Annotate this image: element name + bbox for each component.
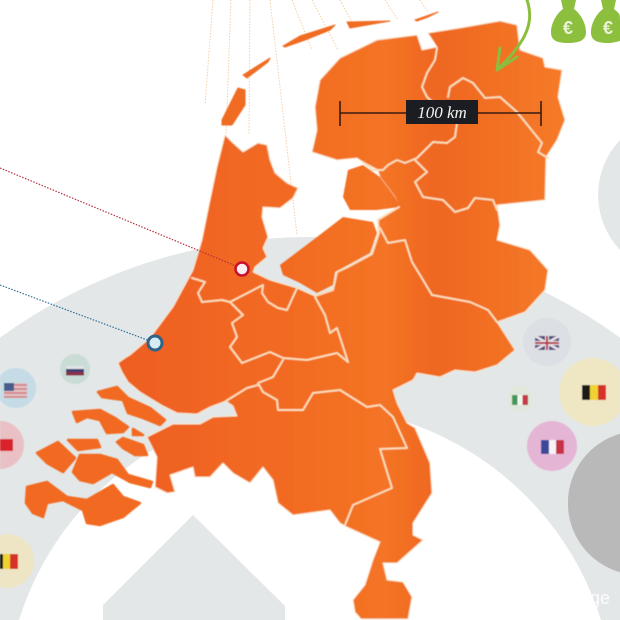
dotted connector: red to Amsterdam bbox=[0, 168, 236, 266]
province borders bbox=[192, 48, 548, 525]
bubbles and flags bbox=[0, 318, 620, 588]
Wadden islands bbox=[222, 12, 438, 125]
watermark text fragment: ge bbox=[590, 588, 610, 608]
background ring: grey band bbox=[0, 237, 620, 620]
mainland provinces bbox=[118, 21, 565, 619]
icon: money bag 2 bbox=[591, 0, 620, 43]
bubble: United States bbox=[0, 368, 36, 408]
bubble: Belgium, left side bbox=[0, 534, 34, 588]
dotted connector: blue to The Hague bbox=[0, 285, 150, 341]
large grey circle top right bbox=[598, 140, 620, 250]
icon: money bag 2: € bbox=[603, 18, 613, 38]
grey house shape at bottom bbox=[103, 515, 285, 620]
bubble: Belgium bbox=[559, 358, 620, 426]
bubble: red flag country bbox=[0, 421, 24, 469]
bubble: United Kingdom bbox=[523, 318, 571, 366]
bubble: Italy bbox=[507, 386, 533, 412]
bubble: Russia bbox=[60, 354, 90, 384]
scale bar: 100 km: 100 km bbox=[417, 103, 467, 122]
large dark grey circle right bbox=[568, 434, 620, 572]
Noordoostpolder bbox=[343, 165, 400, 210]
icon: money bag 1: € bbox=[563, 18, 573, 38]
green arrow to Groningen bbox=[497, 0, 530, 70]
Flevoland bbox=[280, 217, 377, 293]
icon: money bag 1 bbox=[551, 0, 586, 43]
scale bar: 100 km bbox=[340, 100, 541, 126]
Zeeland and South Holland islands bbox=[26, 387, 165, 525]
marker: The Hague bbox=[148, 336, 162, 350]
bubble: France bbox=[527, 421, 577, 471]
marker: Amsterdam bbox=[236, 262, 248, 276]
dotted fan lines at top bbox=[205, 0, 428, 235]
